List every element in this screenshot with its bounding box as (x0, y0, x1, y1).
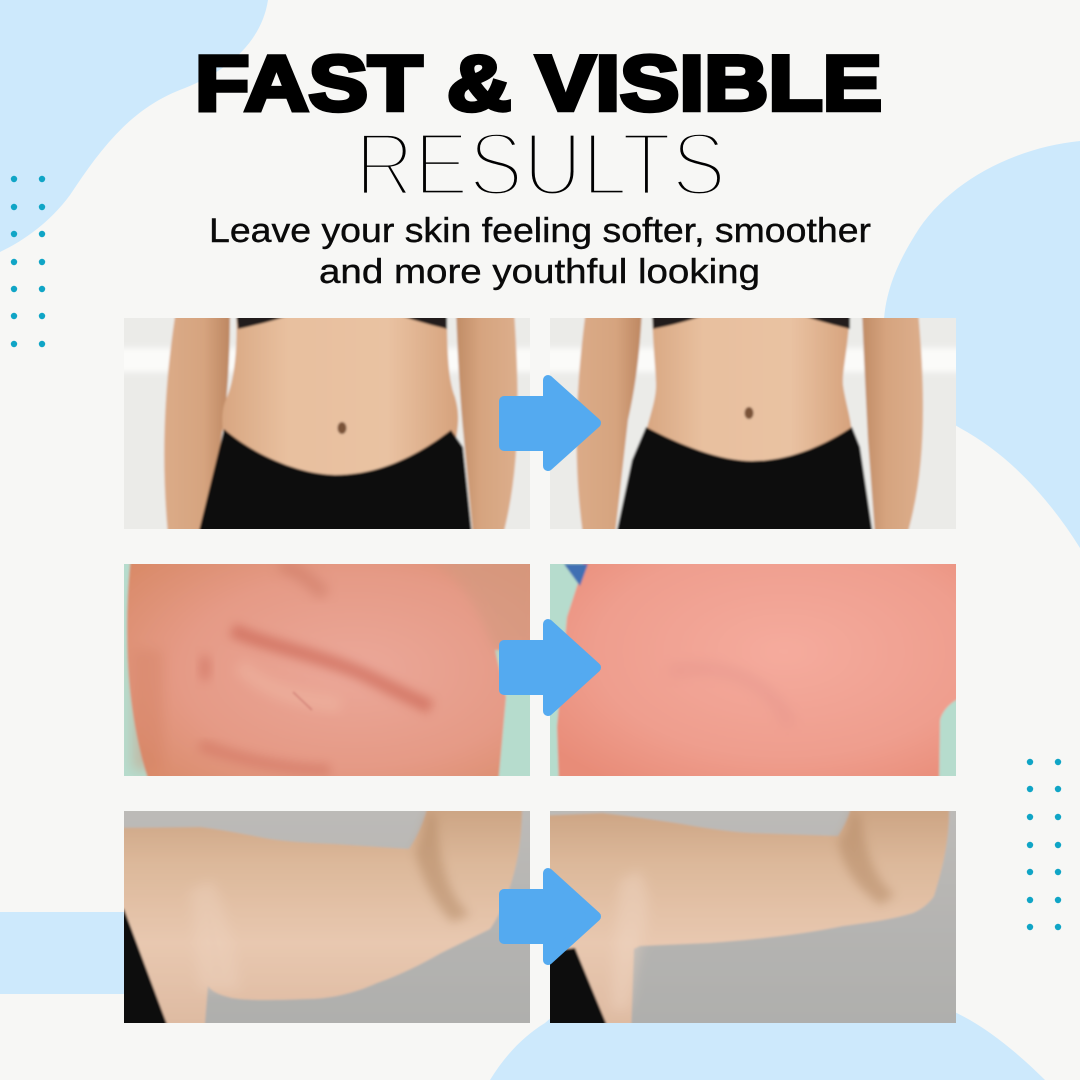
blob: top left (0, 0, 268, 252)
dots: right (1027, 759, 1061, 930)
dots: left (11, 176, 45, 347)
title: fast and visible: FAST & VISIBLE (195, 39, 882, 127)
subtitle line 1: Leave your skin feeling softer, smoother (209, 212, 871, 250)
subtitle line 2: and more youthful looking (319, 253, 760, 291)
arrow: row 1 (504, 380, 596, 466)
title: results: RESULTS (355, 115, 726, 215)
photo: arm before (124, 811, 530, 1023)
blob: lower left band (0, 912, 124, 994)
arrow: row 2 (504, 624, 596, 711)
arrow: row 3 (504, 873, 596, 960)
photo: belly after (550, 318, 956, 529)
photo: cellulite before (124, 564, 530, 776)
photo: belly before (124, 318, 530, 529)
photo: arm after (550, 811, 956, 1023)
photo: cellulite after (550, 564, 956, 776)
blob: bottom (490, 1010, 1045, 1080)
blob: right (884, 141, 1080, 548)
